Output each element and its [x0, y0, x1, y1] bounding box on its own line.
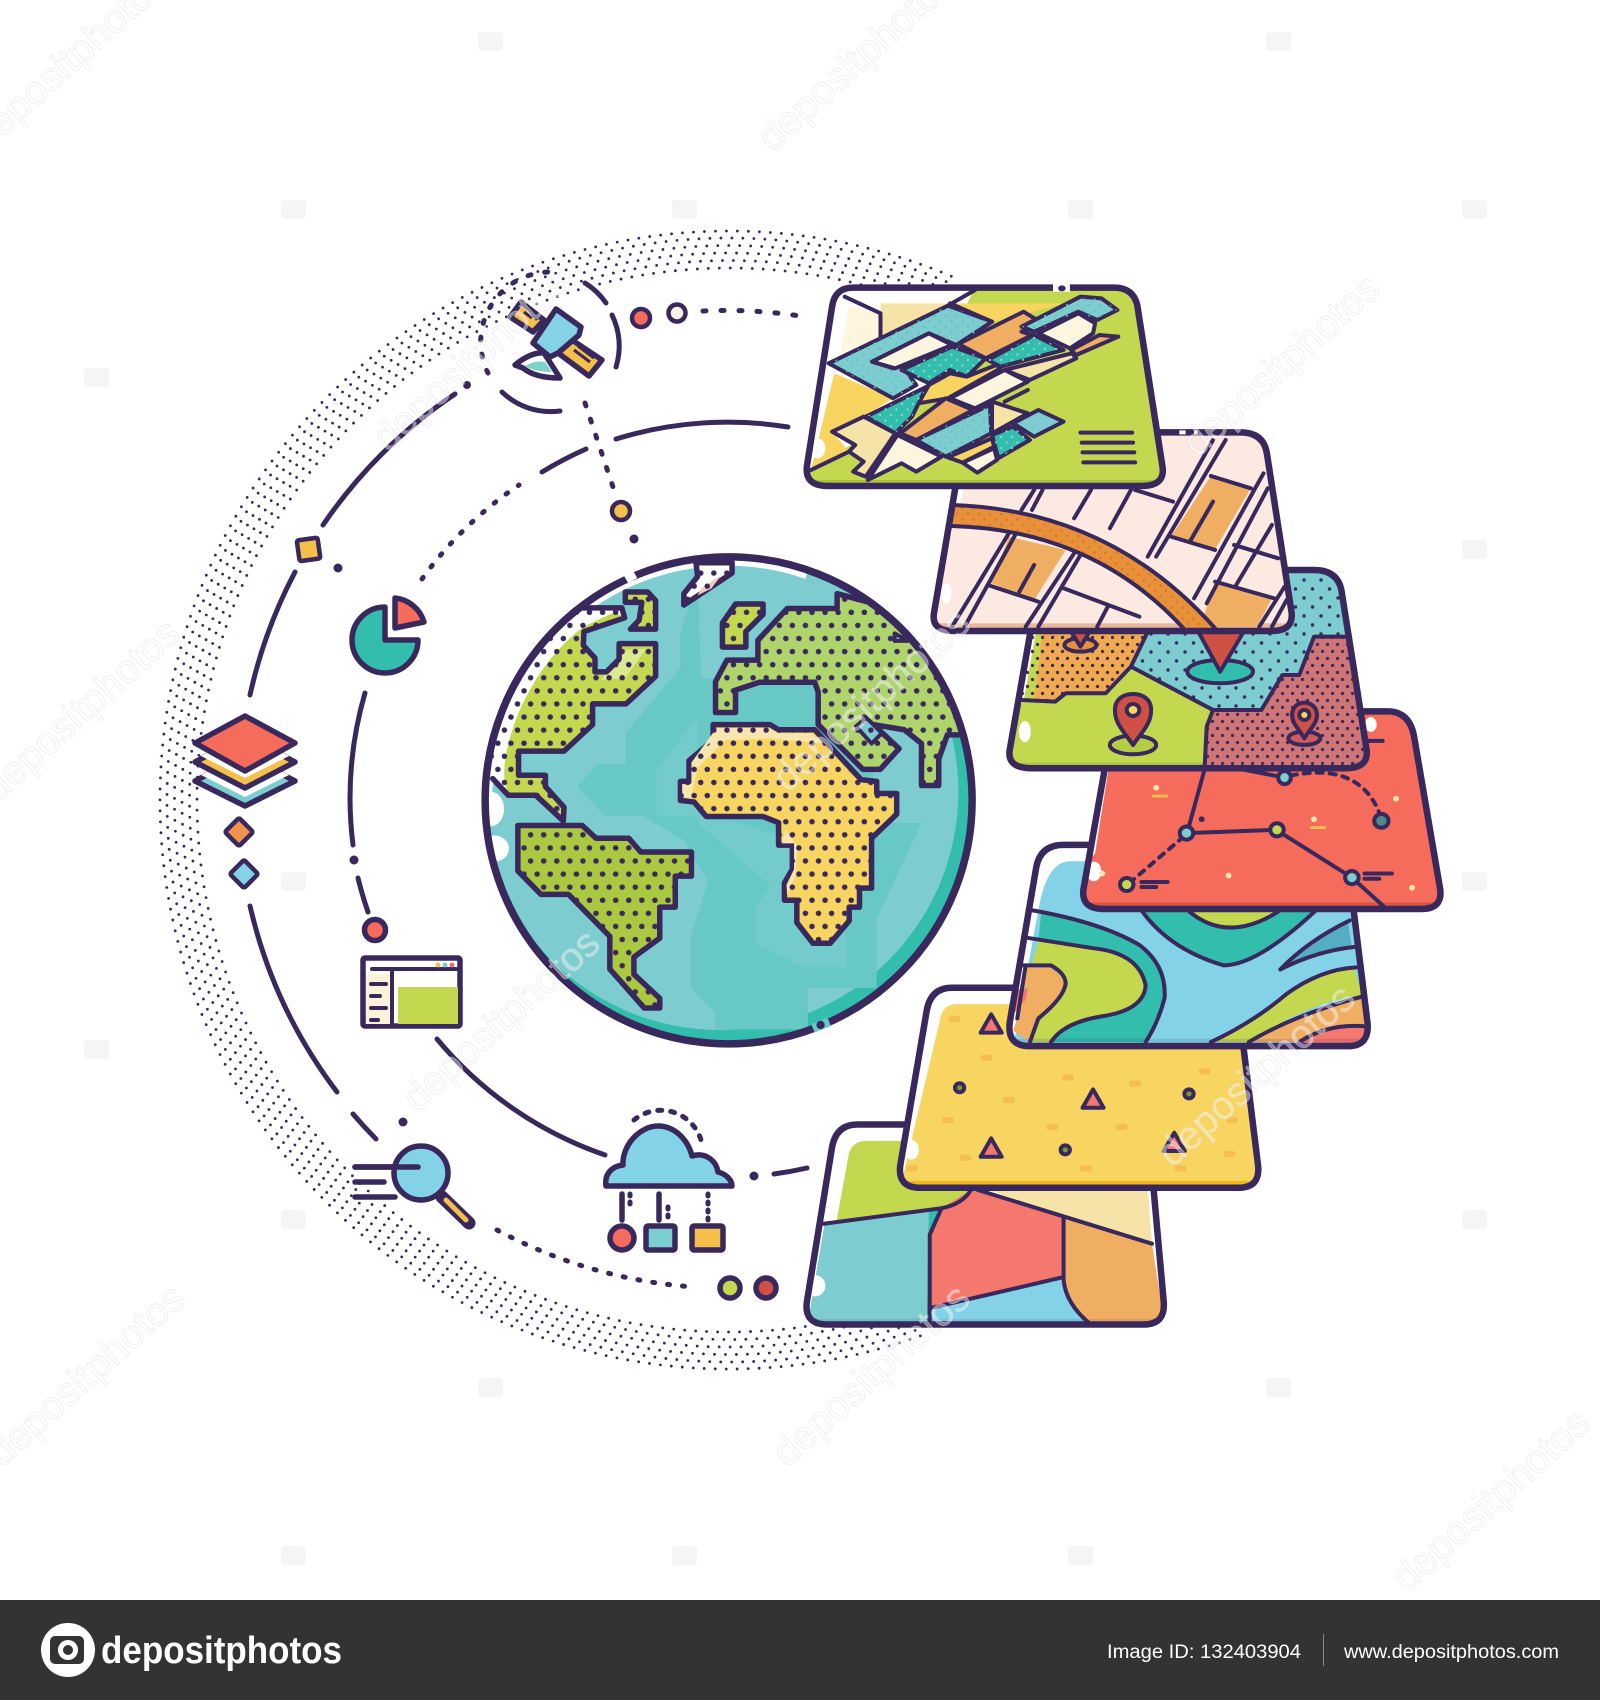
stock watermark text: depositphotos	[1149, 976, 1364, 1175]
node: lime dot	[720, 1278, 740, 1298]
icon: orange diamond	[225, 818, 253, 846]
outer dotted halftone ring	[158, 230, 953, 1370]
stock watermark text: depositphotos	[764, 1276, 979, 1475]
node: yellow dot	[612, 502, 630, 520]
city blocks	[991, 476, 1272, 627]
icon: stacked layers	[195, 716, 295, 806]
continent: UK	[722, 604, 763, 647]
route lines and nodes	[1099, 741, 1415, 906]
map layer 2: street map	[933, 432, 1295, 632]
legend lines	[1080, 433, 1135, 462]
icon: pie chart	[352, 598, 424, 673]
continent: Greenland piece	[625, 592, 656, 629]
roads	[952, 440, 1287, 627]
map layer 5: topographic contours	[1009, 845, 1371, 1047]
footer logo text: depositphotos	[101, 1630, 342, 1672]
stock camera watermark marks	[84, 32, 1487, 1565]
footer bar	[0, 1600, 1600, 1700]
image id: Image ID: 132403904	[1107, 1642, 1301, 1663]
node: dark red dot	[756, 1278, 776, 1298]
icon: blue diamond	[230, 860, 258, 888]
map layer 7: land regions	[803, 1125, 1169, 1329]
stock watermark text: depositphotos	[1384, 1401, 1599, 1600]
icon: satellite with orbit ring	[481, 272, 619, 412]
ocean	[482, 553, 958, 1030]
map layer 1: isometric parcels	[803, 285, 1165, 487]
node: red circle	[364, 920, 386, 940]
globe outline	[485, 557, 972, 1044]
icon: app window	[363, 958, 460, 1026]
continent: South America	[518, 825, 691, 1008]
website: www.depositphotos.com	[1343, 1642, 1559, 1663]
continent: North America	[481, 608, 656, 821]
orbit lines	[250, 310, 807, 1287]
continent: Iceland piece	[684, 563, 732, 605]
main road arc	[952, 505, 1215, 628]
icon: cloud network	[606, 1110, 732, 1250]
icon: yellow square	[297, 538, 320, 561]
continent: Africa	[680, 725, 897, 943]
footer logo icon	[41, 1623, 95, 1677]
node: red dot	[632, 309, 650, 327]
markers	[955, 1014, 1194, 1157]
stock watermark text: depositphotos	[394, 921, 609, 1120]
stock watermark text: depositphotos	[364, 261, 579, 460]
map pins	[1064, 632, 1320, 754]
map layer 6: yellow terrain	[895, 988, 1266, 1191]
continent: Eurasia	[716, 594, 977, 786]
map layer 4: red route network	[1080, 708, 1447, 910]
map layer 3: zones with pins	[1007, 570, 1371, 768]
node: cream dot	[668, 304, 686, 322]
stock watermark text: depositphotos	[764, 601, 979, 800]
globe	[478, 553, 977, 1044]
icon: magnifier	[355, 1146, 469, 1223]
stock watermark text: depositphotos	[1174, 266, 1389, 465]
